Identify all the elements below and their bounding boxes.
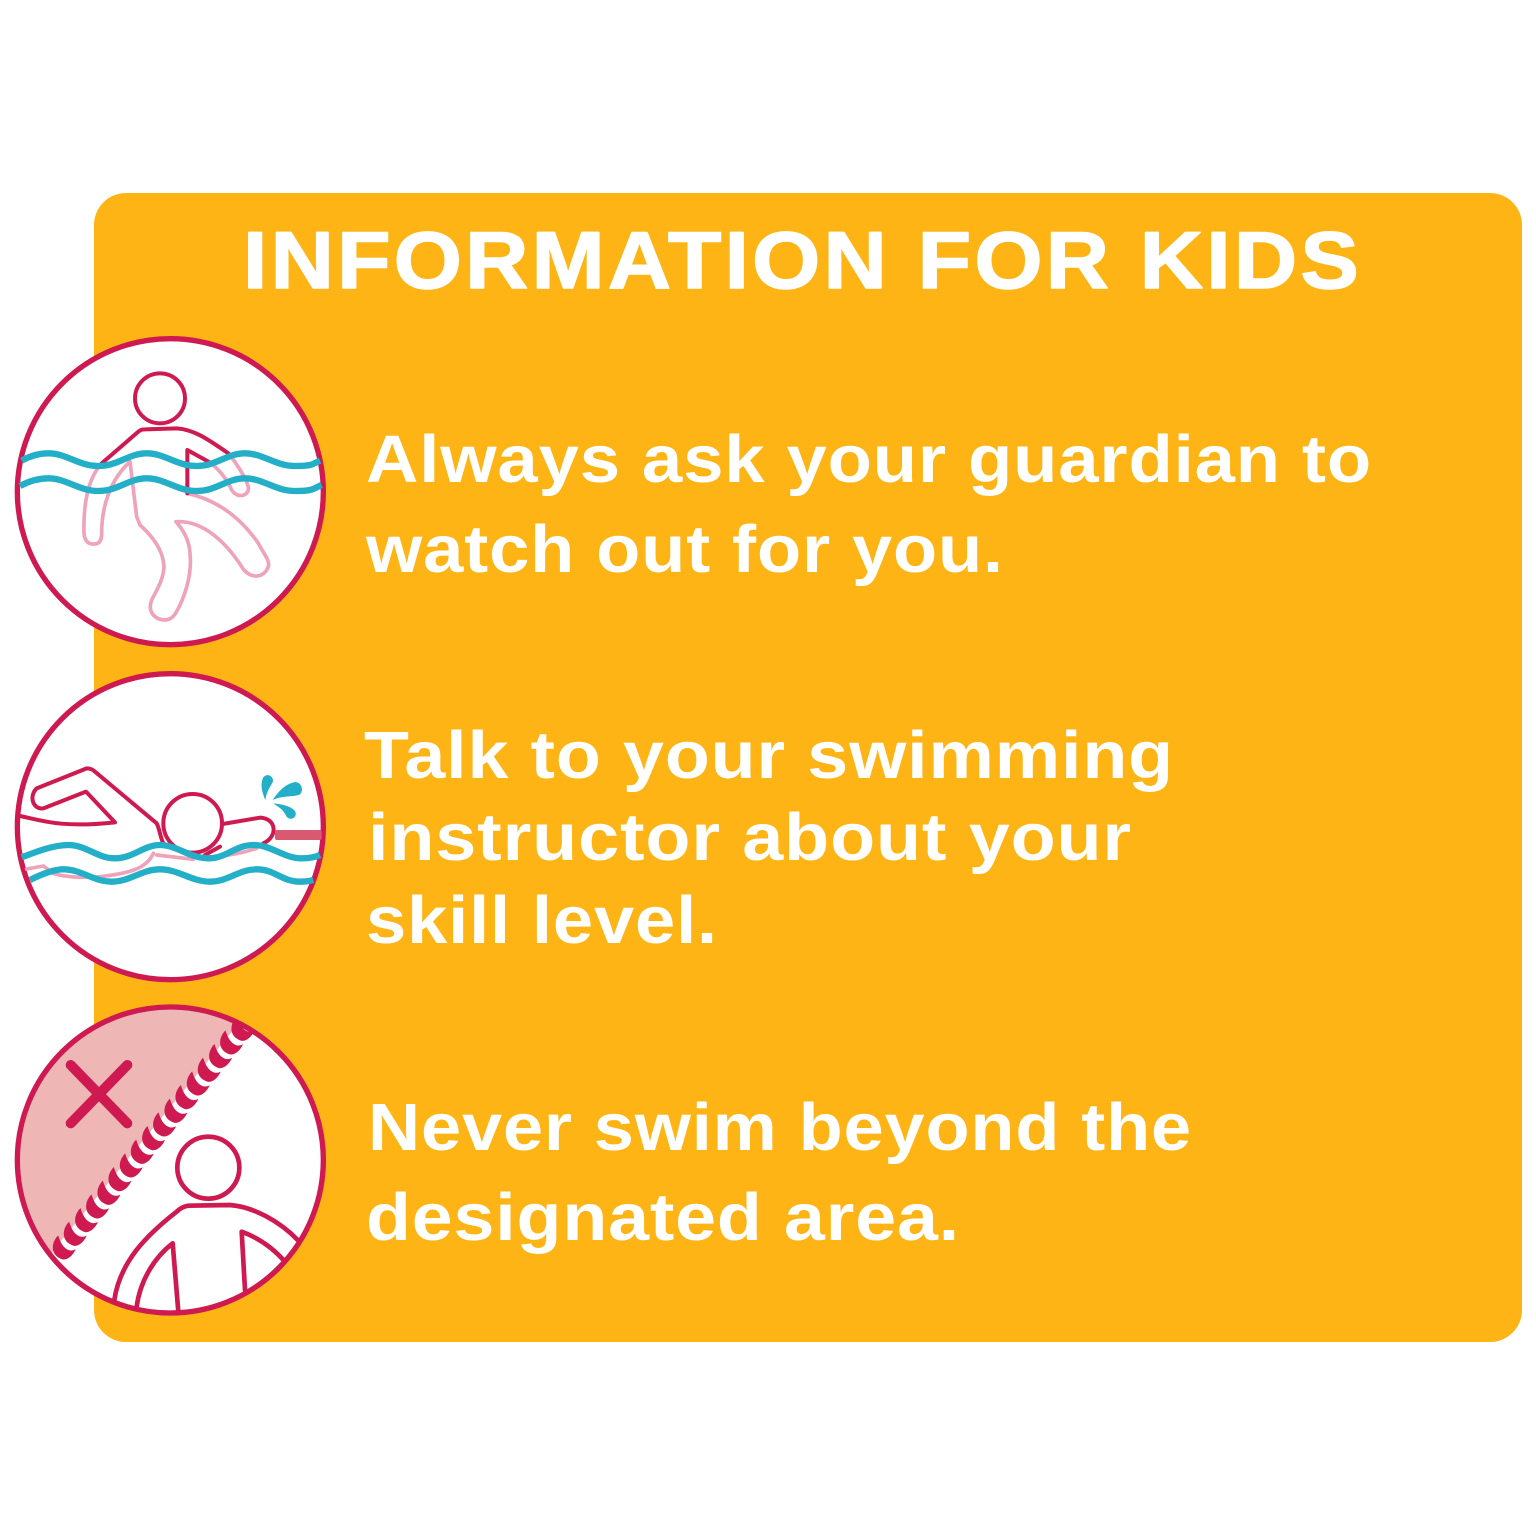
text: second tip: skill level. [366,883,718,958]
icon: swimmer doing front crawl with splash [17,674,323,980]
text: third tip: Never swim beyond the [368,1090,1192,1165]
text: first tip [365,422,1372,587]
icon: child staying inside the rope boundary [0,995,323,1313]
text: first tip: Always ask your guardian to [366,422,1372,497]
text: second tip [364,718,1174,958]
icon: child floating in water with waves [17,339,323,645]
text: third tip: designated area. [366,1180,960,1255]
panel: orange background [94,193,1522,1342]
text: first tip: watch out for you. [365,512,1004,587]
title: INFORMATION FOR KIDS [243,216,1362,306]
text: second tip: instructor about your [368,800,1132,875]
text: third tip [366,1090,1192,1255]
text: second tip: Talk to your swimming [364,718,1174,793]
